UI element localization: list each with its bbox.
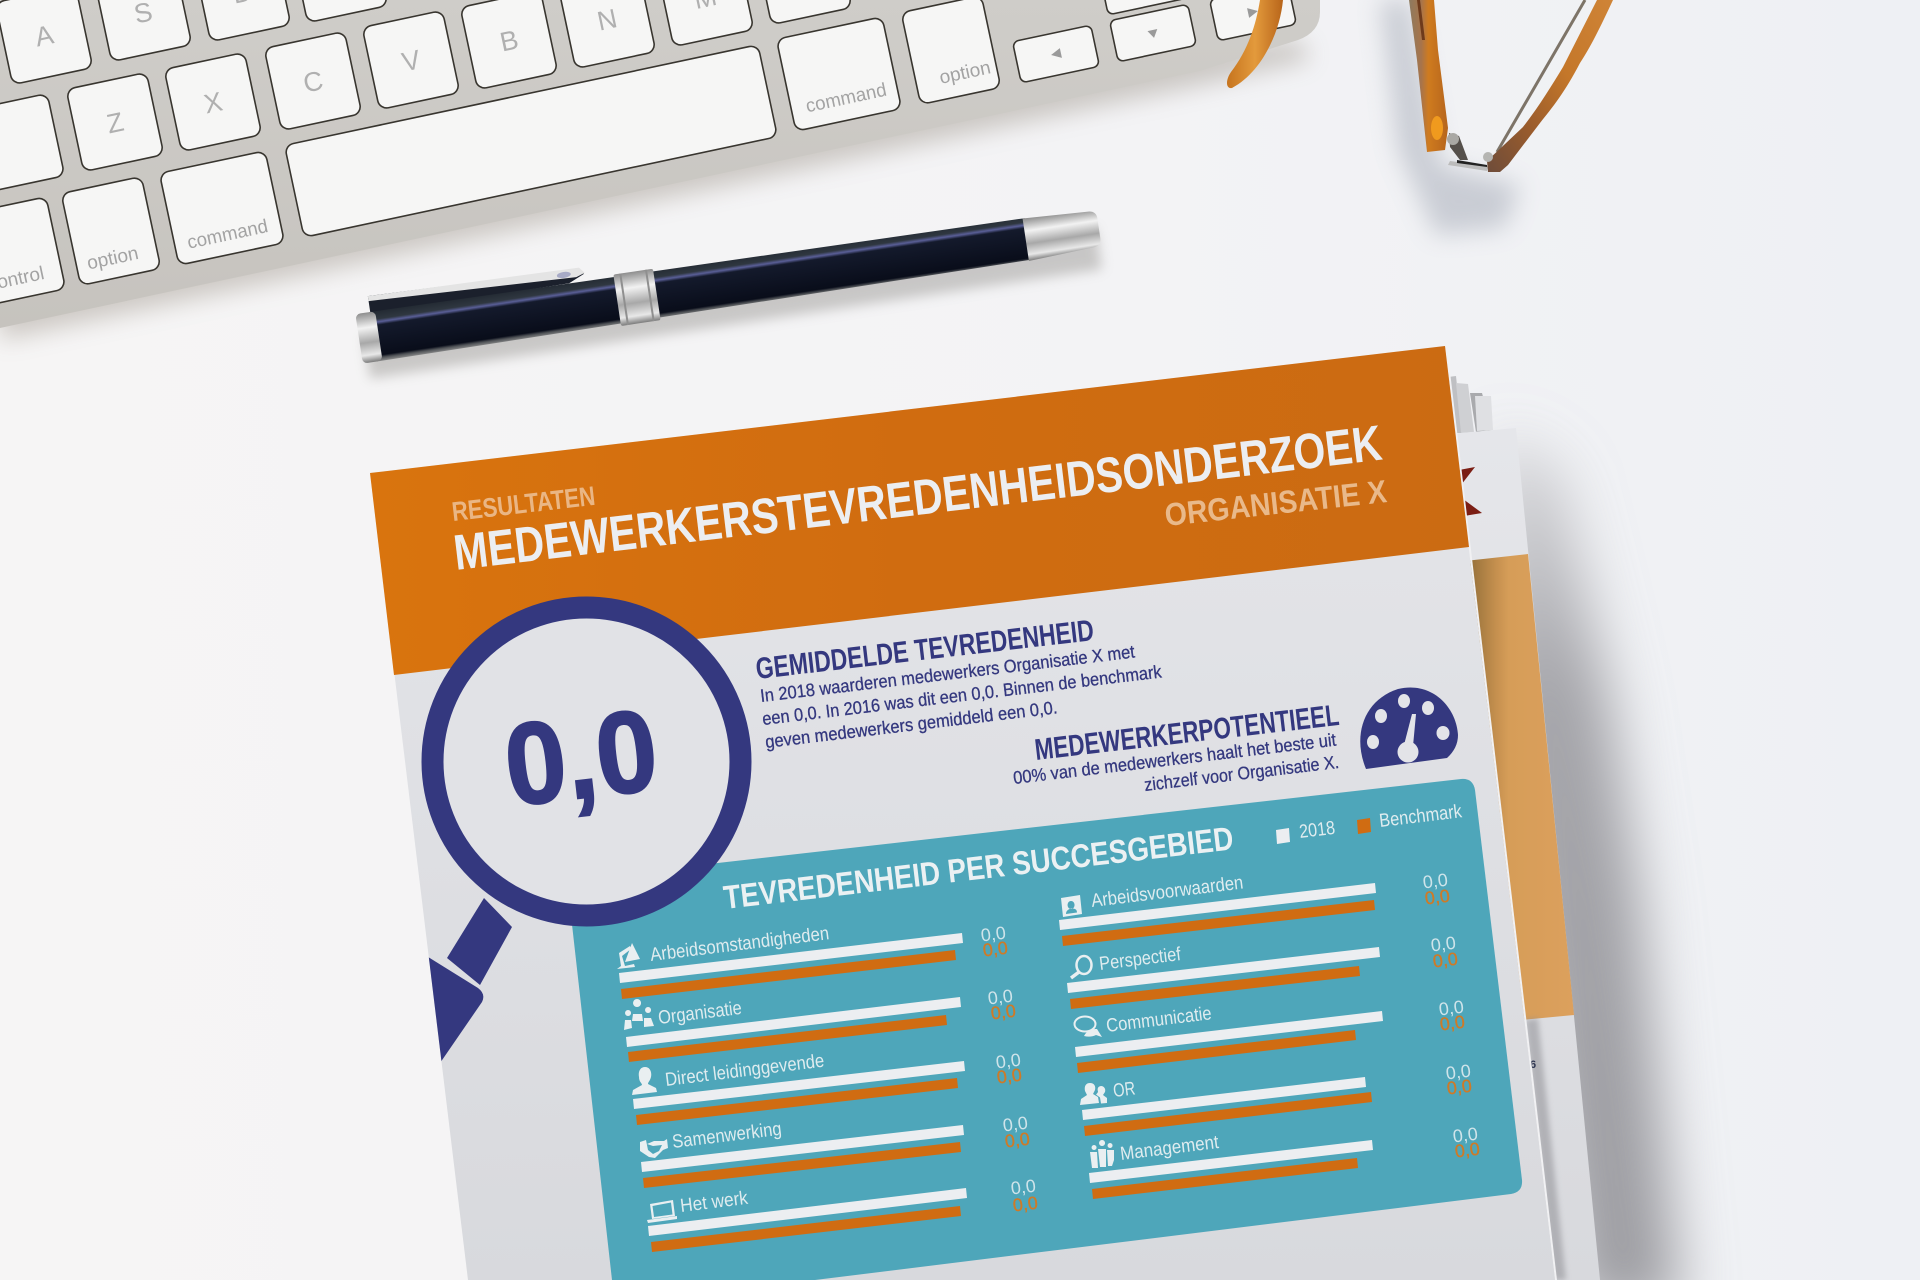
back page: red chevrons xyxy=(1459,467,1482,516)
glasses: arm xyxy=(1409,0,1448,152)
keys: letter row Z to M: B xyxy=(497,24,521,58)
legend xyxy=(1276,801,1463,844)
row: organisatie: 0,0 xyxy=(990,1001,1017,1023)
row: het werk: 0,0 xyxy=(1012,1193,1039,1215)
row: arbeidsvoorwaarden: 0,0 xyxy=(1422,870,1449,892)
pen end cap xyxy=(355,311,383,364)
keys: letter row Z to M: N xyxy=(595,3,620,37)
icon: address book xyxy=(1061,895,1082,917)
icon: magnifier xyxy=(1071,956,1092,978)
panel heading: TEVREDENHEID PER SUCCESGEBIED xyxy=(721,819,1235,916)
keys: letter row A to F xyxy=(0,0,388,85)
text block: gemiddelde tevredenheid: een 0,0. In 2016 was dit een 0,0. Binnen de benchmark xyxy=(761,661,1164,729)
keys: letter row Z to M: Z xyxy=(104,107,126,139)
paper stack: back sheets xyxy=(1448,376,1600,1280)
row: arbeidsvoorwaarden: Arbeidsvoorwaarden xyxy=(1090,872,1244,912)
key: option right: option xyxy=(937,57,993,89)
row: communicatie: 0,0 xyxy=(1438,997,1465,1019)
keys: letter row A to F: A xyxy=(32,19,56,53)
glasses: wire xyxy=(1497,0,1585,152)
pen clip xyxy=(368,264,586,315)
magnifier lens xyxy=(432,608,740,916)
heading: organisatie: ORGANISATIE X xyxy=(1163,473,1389,533)
key: command right xyxy=(776,17,902,131)
header band xyxy=(370,346,1469,675)
row: direct leidinggevende: 0,0 xyxy=(996,1065,1023,1087)
row: samenwerking: Samenwerking xyxy=(671,1119,783,1153)
panel: tevredenheid per succesgebied xyxy=(567,779,1522,1280)
icon: chat bubbles xyxy=(1074,1016,1102,1037)
row: or: OR xyxy=(1112,1078,1136,1102)
pen ring xyxy=(613,269,661,326)
key: option: option xyxy=(85,243,140,274)
row: samenwerking: 0,0 xyxy=(1002,1113,1029,1135)
icon: magnifying glass with score xyxy=(410,608,740,1066)
icon: gauge xyxy=(1360,687,1458,769)
row: perspectief: 0,0 xyxy=(1432,949,1459,971)
pen barrel xyxy=(369,214,1031,362)
keys: letter row Z to M: X xyxy=(201,86,225,120)
row: het werk: 0,0 xyxy=(1010,1176,1037,1198)
row: management xyxy=(1089,1124,1481,1199)
row: arbeidsomstandigheden: 0,0 xyxy=(982,938,1009,960)
row: or xyxy=(1080,1061,1473,1136)
icon: handshake xyxy=(640,1139,668,1158)
row: management: 0,0 xyxy=(1454,1139,1481,1161)
keys: letter row Z to M xyxy=(66,0,852,172)
text block: gemiddelde tevredenheid: GEMIDDELDE TEVREDENHEID xyxy=(754,614,1096,686)
key: command: command xyxy=(185,216,270,254)
row: communicatie: 0,0 xyxy=(1439,1012,1466,1034)
keyboard xyxy=(0,0,1320,340)
row: organisatie: Organisatie xyxy=(657,998,743,1029)
back page: peach band xyxy=(1465,554,1574,1021)
key: shift xyxy=(0,94,65,196)
glasses xyxy=(1227,0,1613,235)
row: arbeidsomstandigheden: 0,0 xyxy=(980,923,1007,945)
row: arbeidsvoorwaarden xyxy=(1059,870,1451,946)
row: arbeidsomstandigheden: Arbeidsomstandigheden xyxy=(649,923,830,966)
glasses: right arm xyxy=(1483,0,1613,172)
pen xyxy=(353,188,1103,379)
row: arbeidsomstandigheden xyxy=(617,923,1009,999)
icon: group xyxy=(1090,1140,1114,1168)
front page xyxy=(370,346,1557,1280)
row: direct leidinggevende: 0,0 xyxy=(995,1050,1022,1072)
legend: Benchmark xyxy=(1378,801,1463,832)
score: 0,0 xyxy=(498,684,664,831)
row: or: 0,0 xyxy=(1446,1076,1473,1098)
heading: main title: MEDEWERKERSTEVREDENHEIDSONDERZOEK xyxy=(451,415,1385,581)
text block: medewerkerpotentieel: zichzelf voor Organisatie X. xyxy=(1143,752,1340,795)
icon: person xyxy=(632,1067,657,1095)
row: direct leidinggevende xyxy=(632,1050,1023,1125)
row: direct leidinggevende: Direct leidinggevende xyxy=(664,1051,825,1091)
icon: organisation xyxy=(624,999,654,1030)
key: option xyxy=(61,177,161,285)
back page: small digit: 6 xyxy=(1530,1059,1536,1071)
text block: gemiddelde tevredenheid: In 2018 waarderen medewerkers Organisatie X met xyxy=(759,641,1136,706)
icon: two people xyxy=(1080,1083,1107,1105)
row: perspectief xyxy=(1067,933,1459,1009)
text block: medewerkerpotentieel: 00% van de medewerkers haalt het beste uit xyxy=(1012,730,1337,788)
row: samenwerking: 0,0 xyxy=(1004,1129,1031,1151)
glasses: hinge xyxy=(1447,133,1488,171)
text block: medewerkerpotentieel xyxy=(1012,699,1341,795)
key: space bar xyxy=(285,45,777,237)
text block: gemiddelde tevredenheid xyxy=(754,614,1164,752)
magnifier handle xyxy=(428,898,512,1062)
row: organisatie: 0,0 xyxy=(987,986,1014,1008)
key: option right xyxy=(901,0,1001,104)
row: arbeidsvoorwaarden: 0,0 xyxy=(1424,886,1451,908)
text block: gemiddelde tevredenheid: geven medewerkers gemiddeld een 0,0. xyxy=(764,697,1058,752)
stacked sheet edges xyxy=(1448,376,1493,433)
row: samenwerking xyxy=(640,1113,1031,1188)
row: organisatie xyxy=(624,986,1017,1062)
row: or: 0,0 xyxy=(1445,1061,1472,1083)
paper stack shadow xyxy=(1490,430,1680,1280)
row: management: 0,0 xyxy=(1452,1124,1479,1146)
glasses: left temple tip xyxy=(1227,0,1283,88)
legend: 2018 xyxy=(1298,818,1336,843)
back page: inner shadow xyxy=(1525,1018,1566,1280)
key: command right: command xyxy=(804,80,889,117)
text block: medewerkerpotentieel: MEDEWERKERPOTENTIEEL xyxy=(1033,699,1341,767)
icon: laptop xyxy=(647,1200,677,1223)
icon: lamp xyxy=(617,943,640,969)
pen tail xyxy=(1023,208,1102,261)
keys: letter row Z to M: V xyxy=(399,44,423,78)
row: het werk xyxy=(647,1176,1039,1252)
key: command xyxy=(159,151,285,265)
row: communicatie: Communicatie xyxy=(1105,1003,1213,1037)
keys: letter row Z to M: C xyxy=(301,65,326,99)
row: perspectief: 0,0 xyxy=(1430,933,1457,955)
back page xyxy=(1450,428,1600,1280)
row: perspectief: Perspectief xyxy=(1098,944,1183,975)
row: het werk: Het werk xyxy=(679,1188,750,1217)
row: communicatie xyxy=(1074,997,1466,1073)
row: management: Management xyxy=(1119,1132,1221,1165)
heading: resultaten: RESULTATEN xyxy=(450,481,597,527)
keys: arrows xyxy=(1013,0,1296,83)
key: control xyxy=(0,197,66,311)
